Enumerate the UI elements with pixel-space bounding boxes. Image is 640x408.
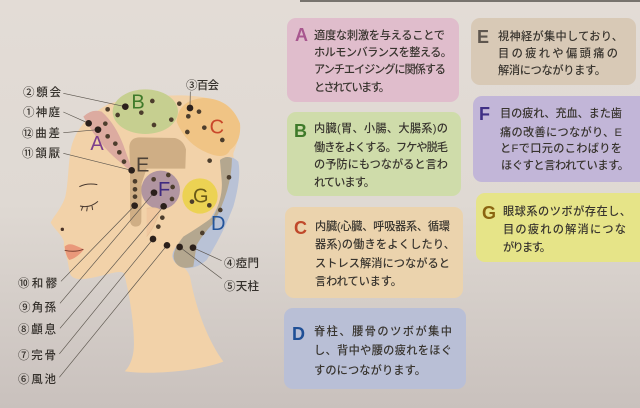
label: 神庭: ①神庭 (23, 105, 60, 119)
panel: E: 解消につながります。 (498, 63, 606, 77)
region letters: C (210, 116, 224, 138)
panel: D (284, 308, 466, 389)
panel: C: 内臓(心臓、呼吸器系、循環 (315, 219, 450, 233)
panel: F (473, 96, 640, 182)
label: 風池: ⑥風池 (18, 372, 56, 386)
panel: A: とされています。 (314, 81, 390, 94)
leader lines (59, 92, 222, 377)
panel: B: 内臓(胃、小腸、大腸系)の (314, 121, 448, 135)
panel: B: れています。 (314, 176, 375, 189)
panel: D: D (292, 324, 305, 344)
region E (129, 137, 186, 227)
label: 曲差: ⑫曲差 (22, 126, 60, 140)
panel: A: 適度な刺激を与えることで (314, 28, 445, 42)
panel: E: 目の疲れや偏頭痛の (498, 46, 618, 60)
panel: B (287, 112, 461, 196)
panel: F: 痛の改善につながり、E (500, 125, 622, 139)
region letters (90, 91, 225, 235)
label: 瘂門: ④瘂門 (224, 256, 259, 270)
panel: G: G (482, 203, 496, 223)
region letters: G (193, 186, 209, 208)
panel: C: ストレス解消につながると (315, 256, 450, 270)
head silhouette (51, 95, 239, 373)
panel: D: 脊柱、腰骨のツボが集中 (314, 324, 452, 338)
panel: G: がります。 (503, 240, 551, 254)
region A (83, 111, 132, 169)
label: 和髎: ⑩和髎 (18, 277, 58, 290)
panel: C: 言われています。 (315, 275, 402, 288)
panel: B: の予防にもつながると言わ (314, 157, 448, 171)
region D (172, 157, 239, 268)
panel: B: B (294, 121, 307, 141)
panel: A: ホルモンバランスを整える。 (314, 45, 452, 59)
region F (141, 171, 180, 209)
panel: E: E (477, 27, 489, 47)
eye and brow (79, 184, 98, 211)
panel: D: し、背中や腰の疲れをほぐ (314, 343, 452, 357)
panel: A: アンチエイジングに関係する (314, 62, 446, 76)
panel: F: ほぐすと言われています。 (501, 159, 629, 172)
label: 顖会: ②顖会 (23, 85, 62, 99)
head diagram (51, 89, 240, 377)
panel: G (476, 193, 640, 262)
label: 完骨: ⑦完骨 (18, 349, 56, 362)
region C (177, 98, 240, 156)
region letters: B (131, 91, 145, 113)
panel: F: 目の疲れ、充血、また歯 (500, 106, 622, 120)
label: 天柱: ⑤天柱 (224, 279, 260, 293)
label: 顱息: ⑧顱息 (18, 322, 56, 336)
ear (147, 208, 160, 237)
major acupoints (85, 103, 196, 251)
region letters: D (211, 213, 225, 235)
panel: A: A (295, 25, 308, 45)
panel: D: すのにつながります。 (314, 363, 426, 377)
acupoint labels (18, 78, 260, 386)
panel: E: 視神経が集中しており、 (498, 29, 623, 43)
panel: B: 働きをよくする。フケや脱毛 (314, 140, 448, 154)
label: 頷厭: ⑪頷厭 (22, 146, 60, 160)
panel: F: とFで口元のこわばりを (500, 142, 622, 155)
panel: A (287, 18, 459, 102)
lips (65, 244, 84, 260)
region B (113, 89, 178, 134)
panel: G: 目の疲れの解消につな (503, 222, 626, 236)
region G (182, 178, 218, 214)
panel: C: 器系)の働きをよくしたり、 (315, 238, 455, 251)
label: 角孫: ⑨角孫 (19, 301, 56, 314)
region letters: E (136, 155, 149, 177)
panel: G: 眼球系のツボが存在し、 (503, 204, 631, 218)
panel: C (285, 207, 463, 298)
panel: F: F (479, 104, 490, 124)
panel: C: C (294, 218, 307, 238)
region letters: F (158, 179, 170, 201)
panel: E (471, 18, 636, 85)
region letters: A (90, 133, 104, 155)
small acupoints (103, 99, 231, 235)
nose dot (61, 228, 64, 231)
label: 百会: ③百会 (186, 78, 220, 92)
